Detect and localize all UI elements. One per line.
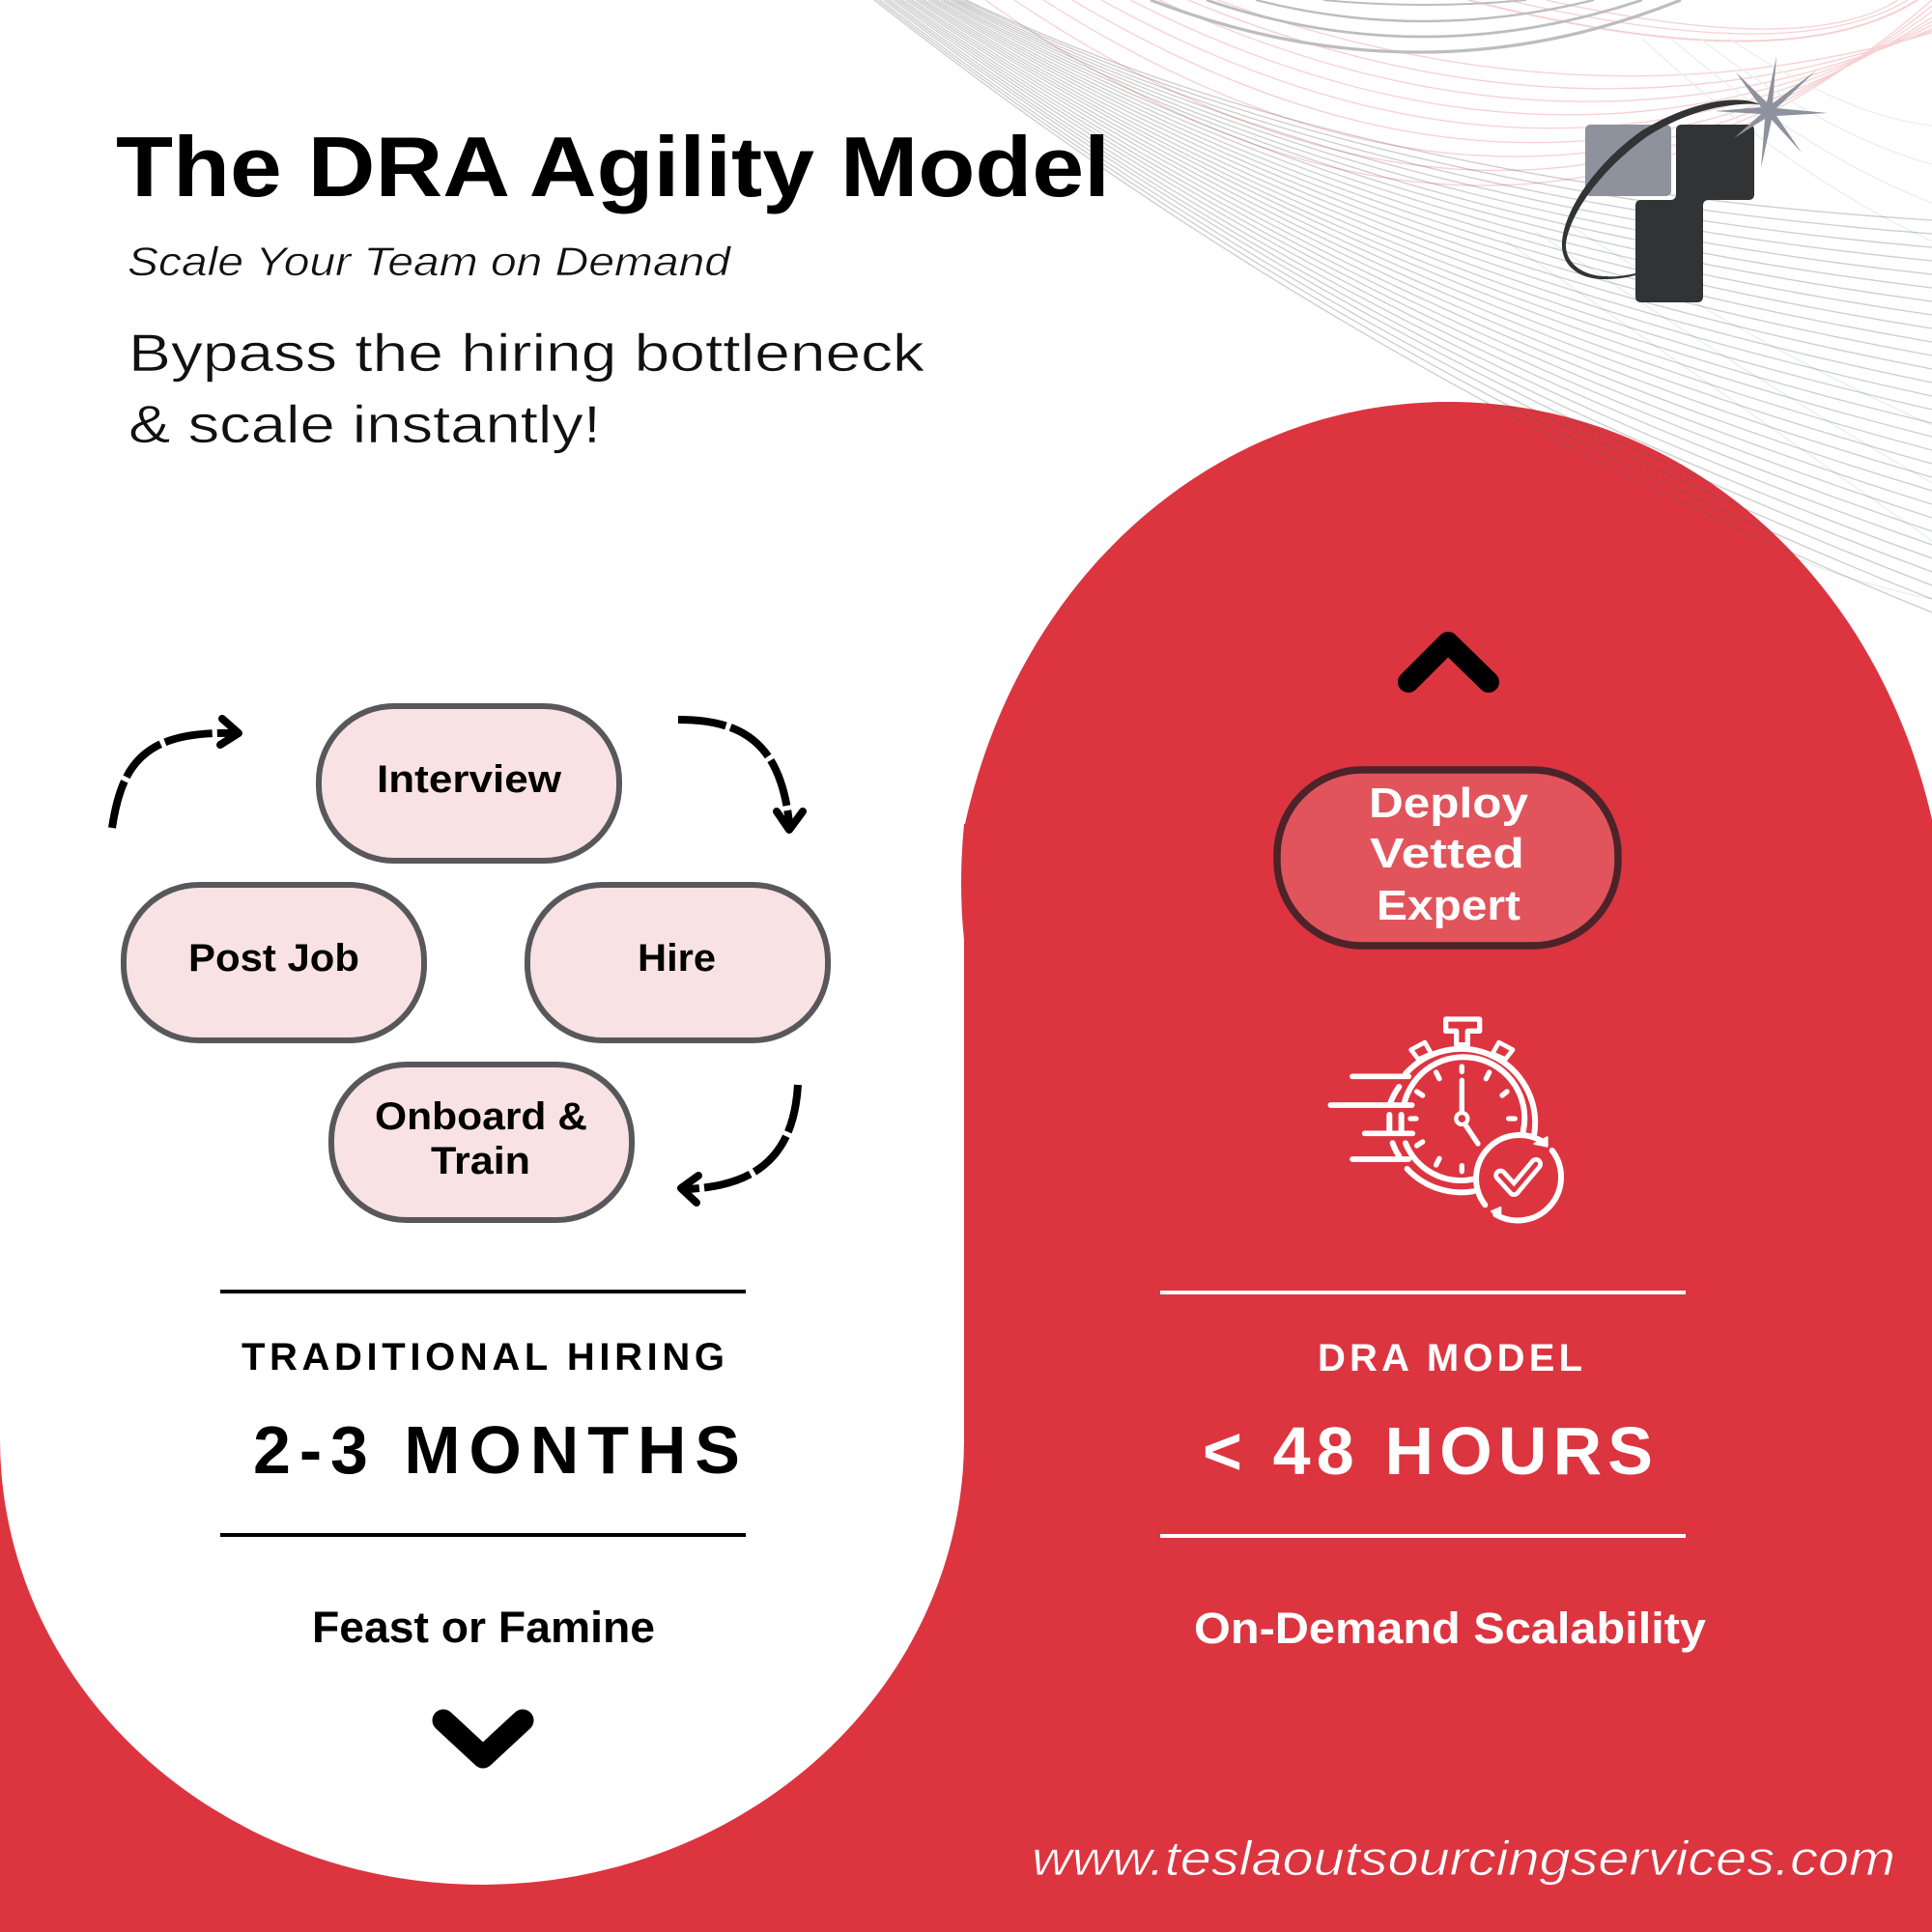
step: deploy vetted expert <box>1277 770 1618 946</box>
title: The DRA Agility Model <box>116 119 1110 214</box>
stat: 2-3 months: 2-3 MONTHS <box>253 1412 740 1488</box>
panel: traditional hiring white arch <box>0 1439 964 1885</box>
tagline: & scale instantly! <box>128 394 601 454</box>
arrow: interview to hire <box>678 720 803 830</box>
step: post job <box>124 885 424 1040</box>
icon: company logo <box>1562 56 1828 302</box>
step: interview <box>319 706 619 861</box>
step: onboard and train: Train <box>431 1140 530 1182</box>
step: interview: Interview <box>377 758 562 801</box>
tagline: Bypass the hiring bottleneck <box>128 323 925 383</box>
step: deploy vetted expert: Expert <box>1377 882 1520 929</box>
step: onboard and train: Onboard & <box>375 1095 587 1138</box>
step: deploy vetted expert: Deploy <box>1369 780 1529 827</box>
icon: stopwatch with check <box>1330 1019 1561 1220</box>
panel: DRA model red arch background <box>961 402 1932 1932</box>
divider: traditional top <box>220 1290 746 1293</box>
step: hire: Hire <box>638 937 716 980</box>
stat: under 48 hours: < 48 HOURS <box>1203 1413 1653 1489</box>
icon: chevron up <box>1408 642 1489 682</box>
caption: feast or famine: Feast or Famine <box>312 1603 655 1652</box>
divider: dra bottom <box>1160 1534 1686 1538</box>
caption: on-demand scalability: On-Demand Scalability <box>1194 1604 1706 1653</box>
step: deploy vetted expert: Vetted <box>1370 830 1524 877</box>
label: dra model: DRA MODEL <box>1318 1337 1582 1379</box>
website url: www.teslaoutsourcingservices.com <box>1032 1832 1895 1886</box>
tagline <box>128 323 925 454</box>
step: onboard and train <box>331 1065 632 1220</box>
process cycle: traditional hiring <box>112 706 828 1220</box>
arrow: hire to onboard <box>681 1085 798 1203</box>
divider: traditional bottom <box>220 1533 746 1537</box>
subtitle: Scale Your Team on Demand <box>128 239 732 284</box>
arrow: post job to interview <box>112 719 239 828</box>
label: traditional hiring: TRADITIONAL HIRING <box>242 1336 724 1378</box>
step: hire <box>527 885 828 1040</box>
icon: chevron down <box>443 1720 523 1757</box>
panel: red base strip <box>0 1439 966 1932</box>
step: post job: Post Job <box>188 937 359 980</box>
divider: dra top <box>1160 1291 1686 1294</box>
